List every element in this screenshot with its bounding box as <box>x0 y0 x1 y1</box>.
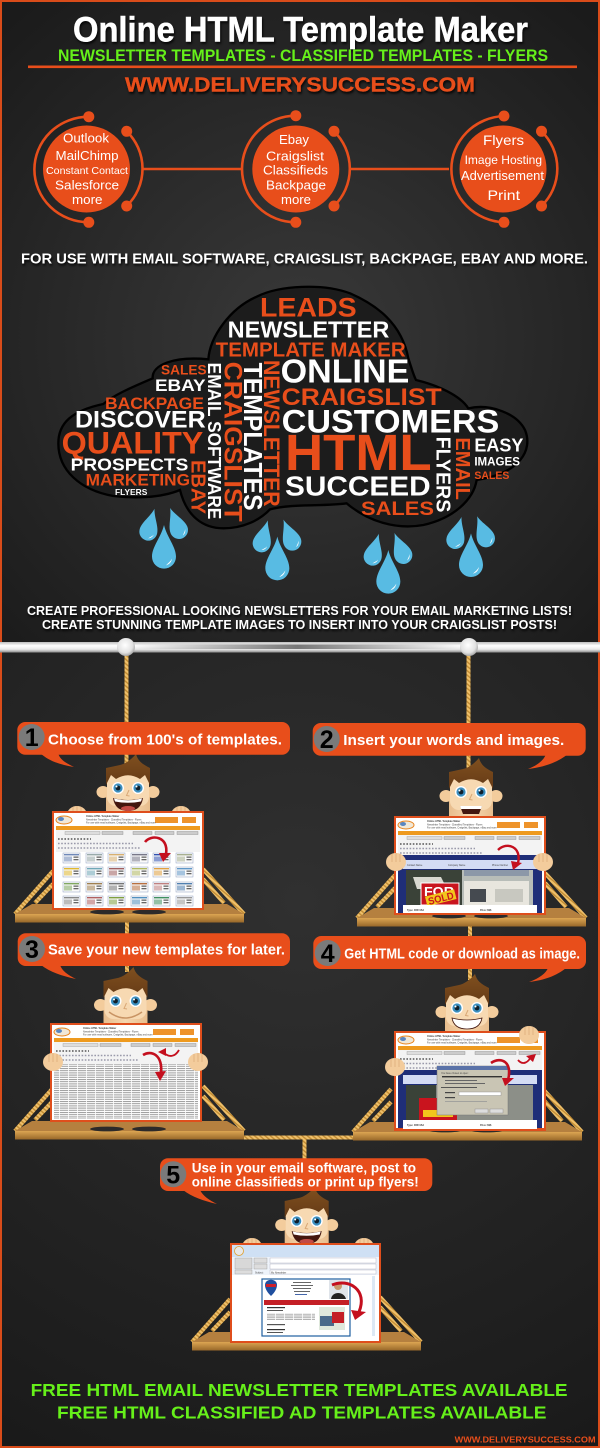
screenshot: template chooser: Online HTML Template Maker <box>86 815 119 818</box>
callout: 5 <box>166 1161 180 1189</box>
shelf <box>15 1086 244 1140</box>
cloud words: SALES <box>161 362 207 377</box>
cloud words: BACKPAGE <box>105 394 204 413</box>
screenshot: template chooser <box>53 812 203 909</box>
hands <box>386 853 553 871</box>
step 1 <box>15 722 290 922</box>
connected circles diagram <box>34 110 557 228</box>
hanging rail <box>0 638 600 656</box>
cloud words: LEADS <box>260 293 357 323</box>
cloud words: EMAIL <box>451 437 473 500</box>
circle: flyers: Print <box>488 187 520 203</box>
callout <box>313 936 586 982</box>
usage statement: FOR USE WITH EMAIL SOFTWARE, CRAIGSLIST, BACKPAGE, EBAY AND MORE. <box>21 251 588 267</box>
ropes <box>126 650 470 1190</box>
screenshot: editor with image: Newsletter Templates - Classified Templates - Flyers <box>427 824 483 826</box>
cloud words: SUCCEED <box>285 471 431 502</box>
callout: Insert your words and images. <box>343 732 564 749</box>
circle: classifieds: Craigslist <box>266 148 324 163</box>
callout: 4 <box>321 940 335 968</box>
circle: email software: Salesforce <box>55 177 119 192</box>
cloud words: HTML <box>285 424 432 481</box>
screenshot: download dialog: Online HTML Template Maker <box>427 1035 460 1038</box>
hands <box>385 1026 539 1076</box>
circle: email software: MailChimp <box>56 148 118 163</box>
screenshot: editor with image: Contact Name <box>407 864 423 867</box>
step 2 <box>313 723 586 926</box>
screenshot: template chooser: Newsletter Templates - Classified Templates - Flyers <box>86 818 142 822</box>
cloud words <box>62 293 523 522</box>
website url: WWW.DELIVERYSUCCESS.COM <box>125 74 475 96</box>
callout: Choose from 100's of templates. <box>48 731 282 748</box>
circle: classifieds <box>242 110 350 228</box>
circle: flyers <box>451 110 557 228</box>
footer url: WWW.DELIVERYSUCCESS.COM <box>455 1434 596 1444</box>
subtitle: NEWSLETTER TEMPLATES - CLASSIFIED TEMPLATES - FLYERS <box>58 47 548 65</box>
cloud words: FLYERS <box>432 437 454 512</box>
screenshot: editor with image: Phone Number <box>492 864 508 867</box>
circle: email software: more <box>72 192 102 207</box>
screenshot: download dialog <box>395 1032 545 1130</box>
screenshot: email client: My Newsletter <box>271 1272 286 1274</box>
cloud words: FLYERS <box>115 487 148 497</box>
cloud words: EBAY <box>187 460 210 514</box>
circle: classifieds: Backpage <box>266 177 326 192</box>
screenshot: saved template: Online HTML Template Maker <box>83 1027 116 1030</box>
dialog box <box>437 1066 508 1115</box>
screenshot: download dialog: Type: 4BR 1BA <box>407 1124 424 1127</box>
shelf <box>192 1297 421 1350</box>
circle: classifieds: more <box>281 192 311 207</box>
callout: online classifieds or print up flyers! <box>192 1174 419 1190</box>
screenshot: editor with image: Company Name <box>448 864 466 867</box>
character <box>440 758 502 832</box>
cloud words: CUSTOMERS <box>282 403 499 439</box>
callout: 1 <box>25 724 39 752</box>
promo statement <box>27 603 572 632</box>
screenshot: email client: Subject: <box>255 1272 264 1274</box>
cloud words: QUALITY <box>62 425 203 460</box>
callout <box>313 723 586 769</box>
character <box>94 967 157 1041</box>
circle: flyers: Flyers <box>483 132 524 148</box>
circle: email software: Constant Contact <box>46 165 128 177</box>
screenshot: download dialog: For use with email software, Craigslist, Backpage, eBay and more <box>427 1042 497 1044</box>
screenshot: saved template: For use with email software, Craigslist, Backpage, eBay and more <box>83 1034 153 1036</box>
character <box>436 974 498 1048</box>
screenshot: email client <box>231 1244 380 1342</box>
cloud words: CRAIGSLIST <box>218 362 246 522</box>
circle: email software: Outlook <box>63 131 110 146</box>
shelf <box>353 1087 582 1140</box>
cloud words: PROSPECTS <box>71 455 188 475</box>
screenshot: editor with image: SOLD <box>427 891 455 908</box>
promo statement: CREATE STUNNING TEMPLATE IMAGES TO INSERT INTO YOUR CRAIGSLIST POSTS! <box>42 617 557 632</box>
screenshot: editor with image: Type: 4BR 1BA <box>407 909 424 912</box>
icon: rain drops <box>137 505 498 594</box>
step 4 <box>313 936 586 1140</box>
character <box>96 754 160 828</box>
hands <box>43 1053 208 1071</box>
cloud words: SALES <box>474 470 509 482</box>
screenshot: editor with image: For use with email software, Craigslist, Backpage, eBay and more <box>427 826 497 830</box>
circle: classifieds: Classifieds <box>263 163 329 178</box>
step 3 <box>15 933 290 1140</box>
cloud words: CRAIGSLIST <box>282 384 442 411</box>
callout <box>160 1158 432 1204</box>
circle: email software <box>34 111 143 228</box>
header rule <box>28 66 577 68</box>
screenshot: saved template: Newsletter Templates - Classified Templates - Flyers <box>83 1030 139 1034</box>
promo statement: CREATE PROFESSIONAL LOOKING NEWSLETTERS FOR YOUR EMAIL MARKETING LISTS! <box>27 603 572 618</box>
circle: flyers: Image Hosting <box>465 153 542 167</box>
character <box>275 1187 338 1261</box>
screenshot: editor with image: FOR <box>424 884 455 899</box>
cloud words: EASY <box>474 435 523 456</box>
screenshot: download dialog: Newsletter Templates - Classified Templates - Flyers <box>427 1038 483 1042</box>
screenshot: download dialog: Price: $$$ <box>480 1124 492 1127</box>
word cloud <box>58 287 527 594</box>
circle: classifieds: Ebay <box>279 132 309 147</box>
shelf <box>357 873 586 926</box>
cloud words: SALES <box>361 499 434 520</box>
cloud words: NEWSLETTER <box>228 316 389 342</box>
callout: 3 <box>25 936 39 964</box>
screenshot: editor with image: Online HTML Template Maker <box>427 820 460 823</box>
cloud words: ONLINE <box>281 353 409 390</box>
shelf <box>15 869 244 922</box>
callout: Save your new templates for later. <box>48 942 285 959</box>
screenshot: template chooser: For use with email software, Craigslist, Backpage, eBay and more <box>86 822 156 824</box>
cloud words: TEMPLATES <box>238 363 266 511</box>
closing statement: FREE HTML EMAIL NEWSLETTER TEMPLATES AVAILABLE <box>31 1380 568 1400</box>
callout: 2 <box>320 726 334 754</box>
cloud words: EBAY <box>155 376 206 395</box>
callout: Use in your email software, post to <box>192 1159 416 1175</box>
cloud words: MARKETING <box>86 471 190 490</box>
cloud words: IMAGES <box>474 454 520 468</box>
callout <box>17 722 290 767</box>
cloud words: EMAIL SOFTWARE <box>204 363 225 519</box>
dialog box: You have chosen to open: <box>441 1072 469 1075</box>
cloud words: TEMPLATE MAKER <box>216 340 406 362</box>
connector lines <box>143 168 449 170</box>
step 5 <box>160 1158 432 1350</box>
screenshot: editor with image <box>395 817 545 914</box>
closing statement: FREE HTML CLASSIFIED AD TEMPLATES AVAILABLE <box>57 1402 546 1422</box>
title: Online HTML Template Maker <box>73 10 528 50</box>
cloud outline <box>58 287 527 528</box>
closing statement <box>31 1380 568 1422</box>
circle: flyers: Advertisement <box>461 169 545 183</box>
email newsletter <box>262 1279 350 1336</box>
screenshot: saved template <box>51 1024 201 1121</box>
screenshot: editor with image: Price: $$$ <box>480 909 492 912</box>
cloud words: DISCOVER <box>75 407 206 434</box>
cloud words: NEWSLETTER <box>259 360 284 507</box>
callout <box>18 933 290 979</box>
